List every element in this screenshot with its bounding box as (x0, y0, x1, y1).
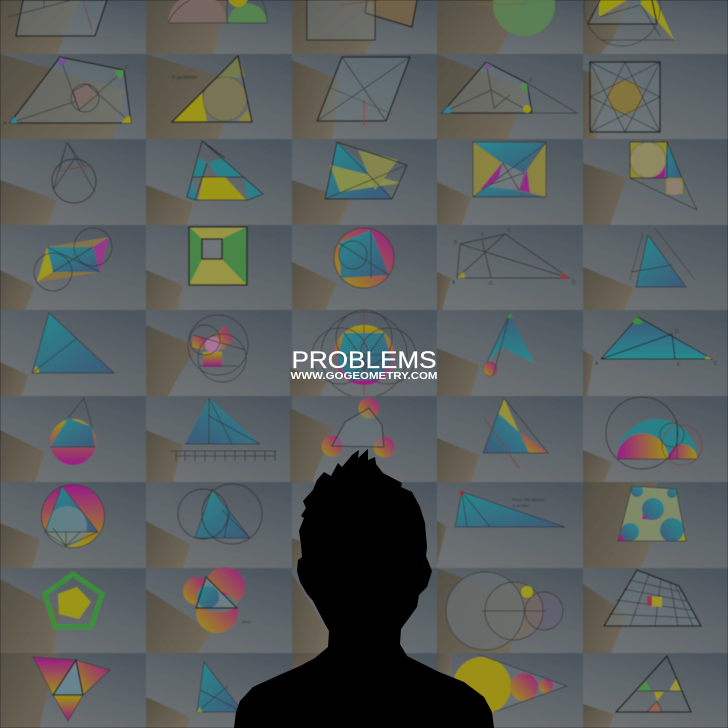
tile: row 2 col 5 square with octagon star (583, 54, 728, 139)
tile: row 4 col 4 quadrilateral ABCD: B (454, 240, 458, 246)
tile: row 5 col 4 concave quadrilateral (437, 310, 583, 396)
tile: row 2 col 4 quadrilateral with extension (437, 54, 583, 139)
tile: row 5 col 5 triangle ABC: C (714, 361, 718, 367)
tile: row 4 col 4 quadrilateral ABCD (437, 225, 583, 310)
heading: problems: PROBLEMS (292, 347, 436, 374)
tile: row 2 col 2 triangle with incircle (146, 54, 292, 139)
tile: row 7 col 4 right triangle with note: of ∠CBD (512, 503, 529, 508)
tile: row 9 col 2 triangle (146, 653, 292, 728)
tile: row 2 col 1 quadrilateral ABCD (0, 54, 146, 139)
tile: row 9 col 4 circles inscribed in a cone (437, 653, 583, 728)
tile: row 5 col 5 triangle ABC (583, 310, 728, 396)
tile: row 8 col 2 lunes on triangle (146, 567, 292, 653)
tile: row 3 col 3 quadrilateral with bands (292, 139, 437, 225)
tile: row 4 col 4 quadrilateral ABCD: G (489, 281, 493, 287)
tile: row 9 col 3 background behind head (292, 653, 437, 728)
tile: row 5 col 2 squares on triangle (146, 310, 292, 396)
tile: row 5 col 3 circle construction (290, 310, 437, 398)
tile: row 7 col 3 background behind head (292, 482, 437, 568)
tile: row 6 col 2 triangle on ruler (146, 396, 292, 482)
tile: row 2 col 1 quadrilateral ABCD: C (125, 65, 129, 71)
tile: row 4 col 5 triangle (583, 225, 728, 310)
tile: row 8 col 3 background behind head (292, 568, 437, 653)
tile: row 1 col 1 quadrilateral (0, 0, 146, 54)
tile: row 5 col 1 triangle (0, 310, 146, 396)
tile: row 6 col 1 circle with quadrilateral (0, 396, 146, 482)
tile: row 2 col 2 triangle with incircle: P perimeter (172, 75, 198, 81)
tile: row 4 col 1 parallelogram and circles (0, 225, 146, 310)
tile: row 7 col 1 circle with triangle (0, 482, 146, 568)
tile: row 7 col 5 trapezoid with circles (583, 482, 728, 568)
tile: row 8 col 5 quadrilateral grid (583, 568, 728, 653)
tile: row 4 col 4 quadrilateral ABCD: C (507, 228, 511, 234)
silhouette of a person (234, 449, 494, 728)
tile: row 2 col 1 quadrilateral ABCD: A (3, 121, 7, 127)
tile: row 5 col 5 triangle ABC: D (675, 329, 679, 335)
tile: row 6 col 5 arbelos circles (583, 396, 728, 482)
tile: row 2 col 4 quadrilateral with extension: C (529, 78, 533, 84)
tile: row 4 col 4 quadrilateral ABCD: F (481, 233, 484, 239)
tile: row 5 col 5 triangle ABC: E (677, 362, 681, 368)
website url: WWW.GOGEOMETRY.COM (290, 370, 438, 382)
tile: row 6 col 3 three circles and quadrilateral (290, 396, 437, 482)
tile: row 8 col 2 lunes on triangle: Area: (242, 619, 252, 624)
tile: row 7 col 4 right triangle with note (437, 482, 583, 568)
tile: row 8 col 4 tangent circles (437, 568, 583, 653)
tile: row 2 col 3 parallelogram (292, 54, 437, 139)
tile: row 5 col 5 triangle ABC: A (595, 361, 599, 367)
tile: row 6 col 4 triangle sections (437, 396, 583, 482)
tile: row 9 col 1 yellow-magenta triangles (0, 653, 146, 728)
tile: row 3 col 1 circle and cevians (0, 139, 146, 225)
tile: row 4 col 4 quadrilateral ABCD: D (572, 280, 576, 286)
tile: row 1 col 3 overlapping squares (292, 0, 437, 54)
tile: row 3 col 4 rectangle with shaded regions (437, 139, 583, 225)
tile: row 4 col 4 quadrilateral ABCD: A (452, 280, 456, 286)
tile: row 1 col 4 green circle (437, 0, 583, 54)
tile: row 7 col 4 right triangle with note: Prove: AB bisector (512, 497, 546, 502)
tile: row 7 col 2 two circles and triangle (146, 482, 292, 568)
tile: row 9 col 5 triangle with small triangles (583, 653, 728, 728)
tile: row 4 col 3 circle with quadrilateral (292, 225, 437, 310)
tile: row 3 col 2 triangle with colored regions (146, 139, 292, 225)
tile: row 3 col 5 squares with incircles (583, 139, 728, 225)
tile: row 1 col 5 yellow triangle star (583, 0, 728, 54)
tile: row 4 col 2 square ring (146, 225, 292, 310)
tile: row 8 col 1 pentagon ring (0, 568, 146, 653)
tile: row 1 col 2 semicircles (146, 0, 292, 54)
